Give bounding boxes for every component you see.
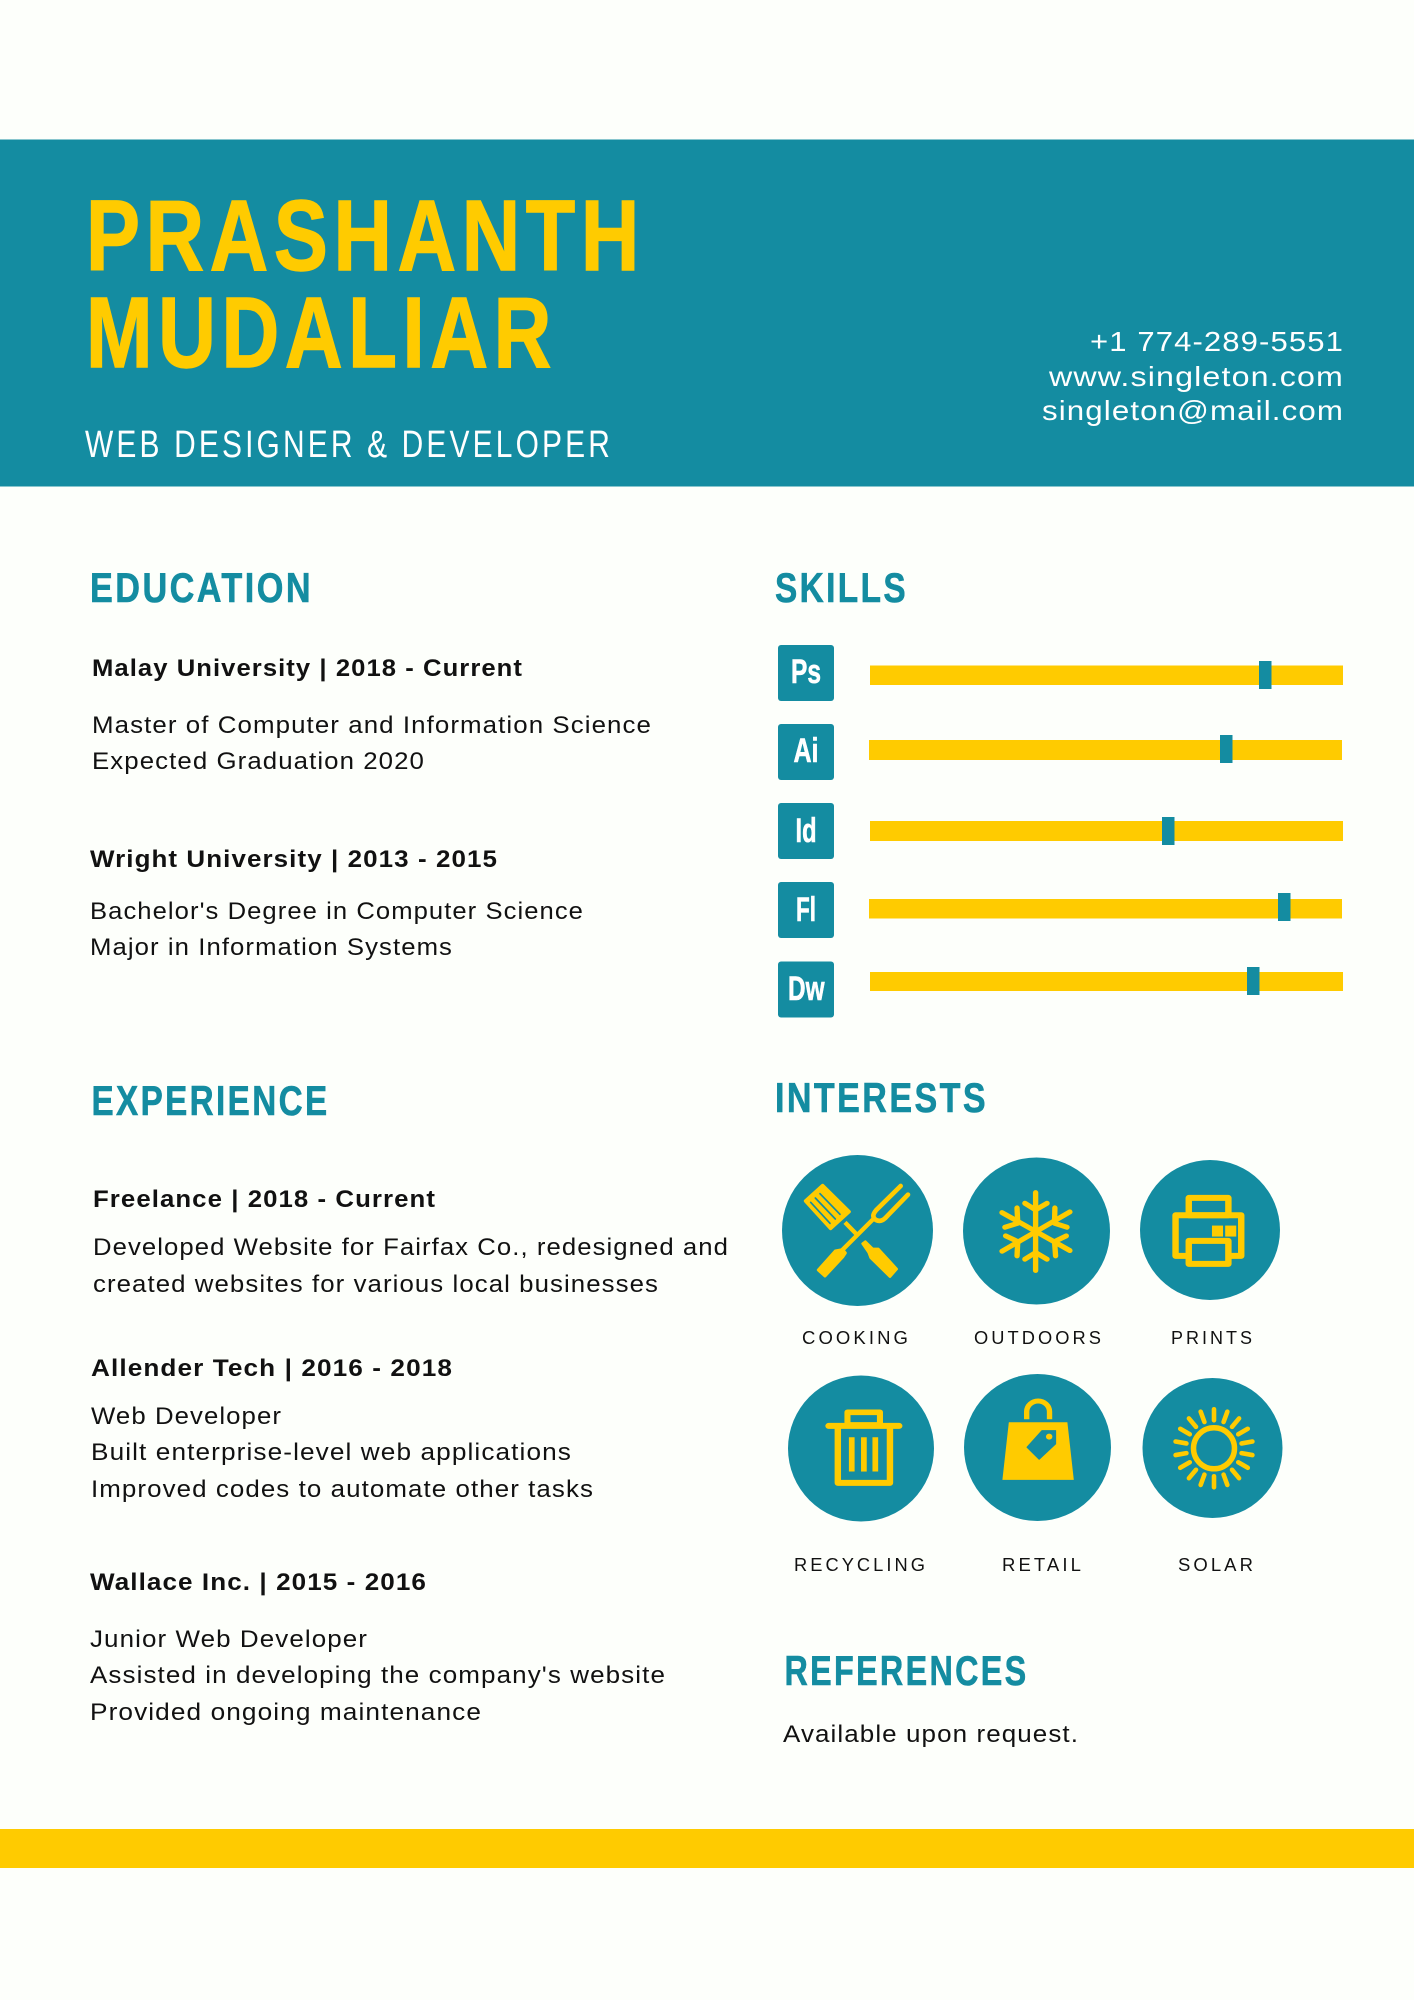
entry: Wallace Inc. [90,1569,666,1726]
icon: shopping bag with tag [1002,1401,1074,1480]
interest: recycling [788,1376,934,1522]
contact details: www.singleton.com [1048,361,1344,392]
icon: sun [1176,1409,1252,1487]
skill row: Flash [778,882,1342,938]
icon: crossed spatula and fork [806,1186,908,1277]
entry: Wallace Inc.: Provided ongoing maintenance [90,1699,482,1726]
label: solar: SOLAR [1178,1555,1256,1575]
entry: Freelance: Developed Website for Fairfax Co., redesigned and [93,1234,729,1261]
skill row: Dreamweaver: Dw [788,970,825,1008]
interest: outdoors [963,1158,1110,1304]
skill row: Dreamweaver [778,962,1343,1018]
section: experience [90,1077,729,1726]
entry: Wallace Inc.: Assisted in developing the company's website [90,1662,666,1689]
entry: Wright University: Bachelor's Degree in Computer Science [90,898,584,925]
entry: Allender Tech [91,1355,594,1503]
skill row: Photoshop: Ps [791,653,821,691]
interest: cooking [782,1155,933,1306]
entry: Allender Tech: Allender Tech | 2016 - 2018 [91,1355,453,1382]
entry: Malay University: Malay University | 2018 - Current [92,655,523,682]
entry: Malay University: Expected Graduation 2020 [92,748,425,775]
entry: Malay University: Master of Computer and Information Science [92,712,652,739]
entry: Wallace Inc.: Wallace Inc. | 2015 - 2016 [90,1569,427,1596]
entry: Freelance: created websites for various local businesses [93,1271,659,1298]
entry: Allender Tech: Improved codes to automate other tasks [91,1476,594,1503]
label: prints: PRINTS [1171,1328,1255,1348]
references text: Available upon request. [783,1721,1079,1748]
entry: Malay University [92,655,652,775]
skill row: InDesign: Id [796,812,816,850]
entry: Freelance [93,1186,729,1298]
interest: solar [1142,1378,1282,1518]
contact details [1042,326,1344,426]
section: education [90,564,652,961]
entry: Wright University: Wright University | 2013 - 2015 [90,846,498,873]
contact details: +1 774-289-5551 [1090,326,1344,357]
heading: experience: EXPERIENCE [92,1077,330,1124]
label: cooking: COOKING [802,1328,911,1348]
skill row: Illustrator: Ai [794,732,818,770]
interest: prints [1140,1160,1280,1300]
contact details: singleton@mail.com [1042,395,1344,426]
heading: interests: INTERESTS [775,1074,988,1121]
heading: education: EDUCATION [90,564,313,611]
footer band [0,1829,1414,1868]
section: references [783,1647,1079,1748]
skill row: Illustrator [778,724,1342,780]
entry: Wright University [90,846,584,961]
section: interests [775,1074,1282,1575]
heading: references: REFERENCES [784,1647,1028,1694]
label: recycling: RECYCLING [794,1555,928,1575]
interest: retail [964,1374,1111,1521]
label: retail: RETAIL [1002,1555,1084,1575]
entry: Freelance: Freelance | 2018 - Current [93,1186,436,1213]
name: MUDALIAR [86,277,557,389]
skill row: Flash: Fl [796,891,816,929]
header band [0,140,1414,486]
entry: Wallace Inc.: Junior Web Developer [90,1626,368,1653]
icon: printer [1176,1198,1241,1264]
entry: Allender Tech: Web Developer [91,1403,282,1430]
skill row: InDesign [778,803,1343,859]
section: skills [775,564,1343,1018]
entry: Wright University: Major in Information Systems [90,934,453,961]
heading: skills: SKILLS [775,564,908,611]
icon: snowflake [1002,1193,1070,1271]
label: outdoors: OUTDOORS [974,1328,1104,1348]
name: PRASHANTH [86,180,645,292]
skill row: Photoshop [778,645,1343,701]
icon: trash bin [829,1412,899,1483]
name [86,180,645,389]
entry: Allender Tech: Built enterprise-level web applications [91,1439,572,1466]
job title: WEB DESIGNER & DEVELOPER [85,424,613,466]
